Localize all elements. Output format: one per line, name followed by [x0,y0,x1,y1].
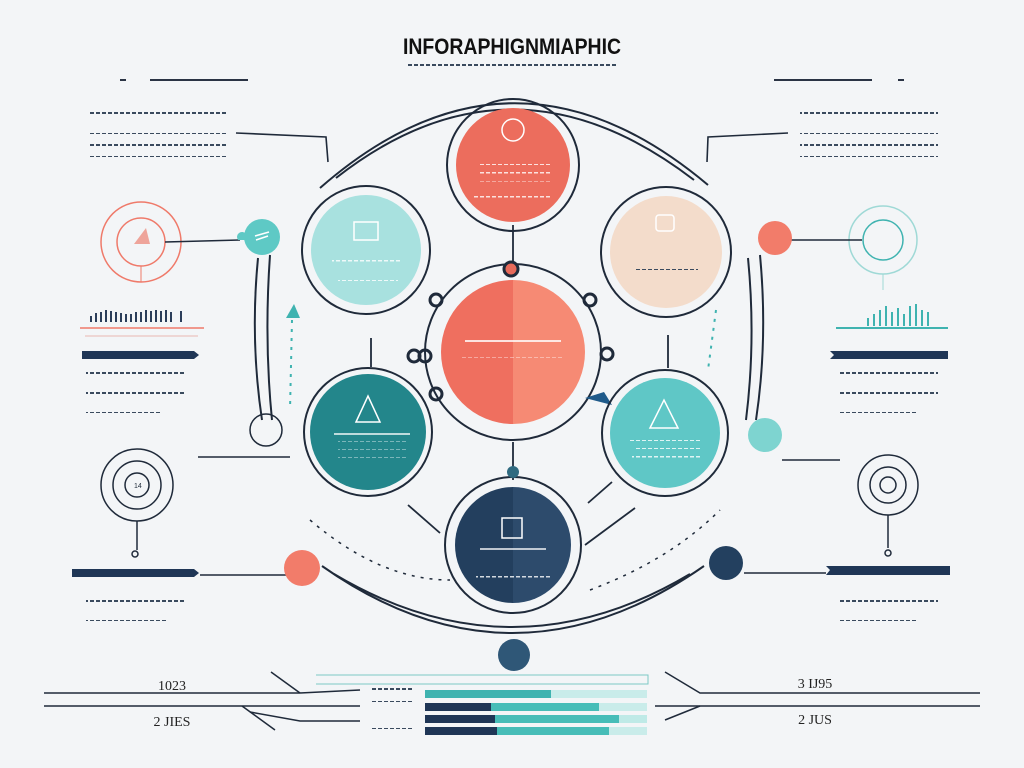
text block: left middle [86,372,186,413]
text block: right bottom [838,590,938,621]
bottom right lines and labels: 3 IJ95 [798,677,832,692]
bottom left lines and labels: 1023 [158,679,186,694]
circle: bottom-right teal [602,370,728,496]
circle: top red [447,99,579,231]
text block: top left [88,112,228,157]
bottom right lines and labels [655,672,980,728]
bottom bar chart [316,675,648,735]
icon: navy dot [709,546,743,580]
left bar chart [80,310,204,336]
banner right 1 [830,351,948,359]
left concentric icon: 14 [134,483,142,490]
dotted arrows [290,310,716,410]
bottom left lines and labels: 2 JIES [154,715,190,730]
title: INFORAPHIGNMIAPHIC [403,34,621,59]
text block: left bottom [86,590,186,621]
bottom left lines and labels [44,672,360,730]
left target icon [101,202,240,282]
text block: top right [800,112,938,157]
circle: center [408,262,613,440]
title [403,34,621,67]
circle: bottom navy [445,466,581,613]
icon: salmon dot [284,550,320,586]
connectors center [371,225,668,545]
bottom right lines and labels: 2 JUS [798,713,832,728]
text block: right middle [838,372,938,413]
arrows top connectors [236,133,788,162]
banner left 2 [72,569,290,577]
right bar chart [836,304,948,328]
banner right 2 [744,566,950,575]
circle: top-left teal [302,186,430,314]
top header lines [120,79,904,81]
right concentric icon [858,455,918,556]
icon: left teal dot [237,219,280,255]
icon: right salmon dot [758,221,792,255]
banner left 1 [82,351,199,359]
icon: bottom navy dot [498,639,530,671]
icon: right teal dot [748,418,840,460]
circle: top-right beige [601,187,731,317]
left concentric icon [101,449,173,557]
circle: bottom-left teal [304,368,432,496]
right target icon [790,206,917,290]
outer arcs [255,103,763,633]
icon: left small circle [198,414,290,457]
